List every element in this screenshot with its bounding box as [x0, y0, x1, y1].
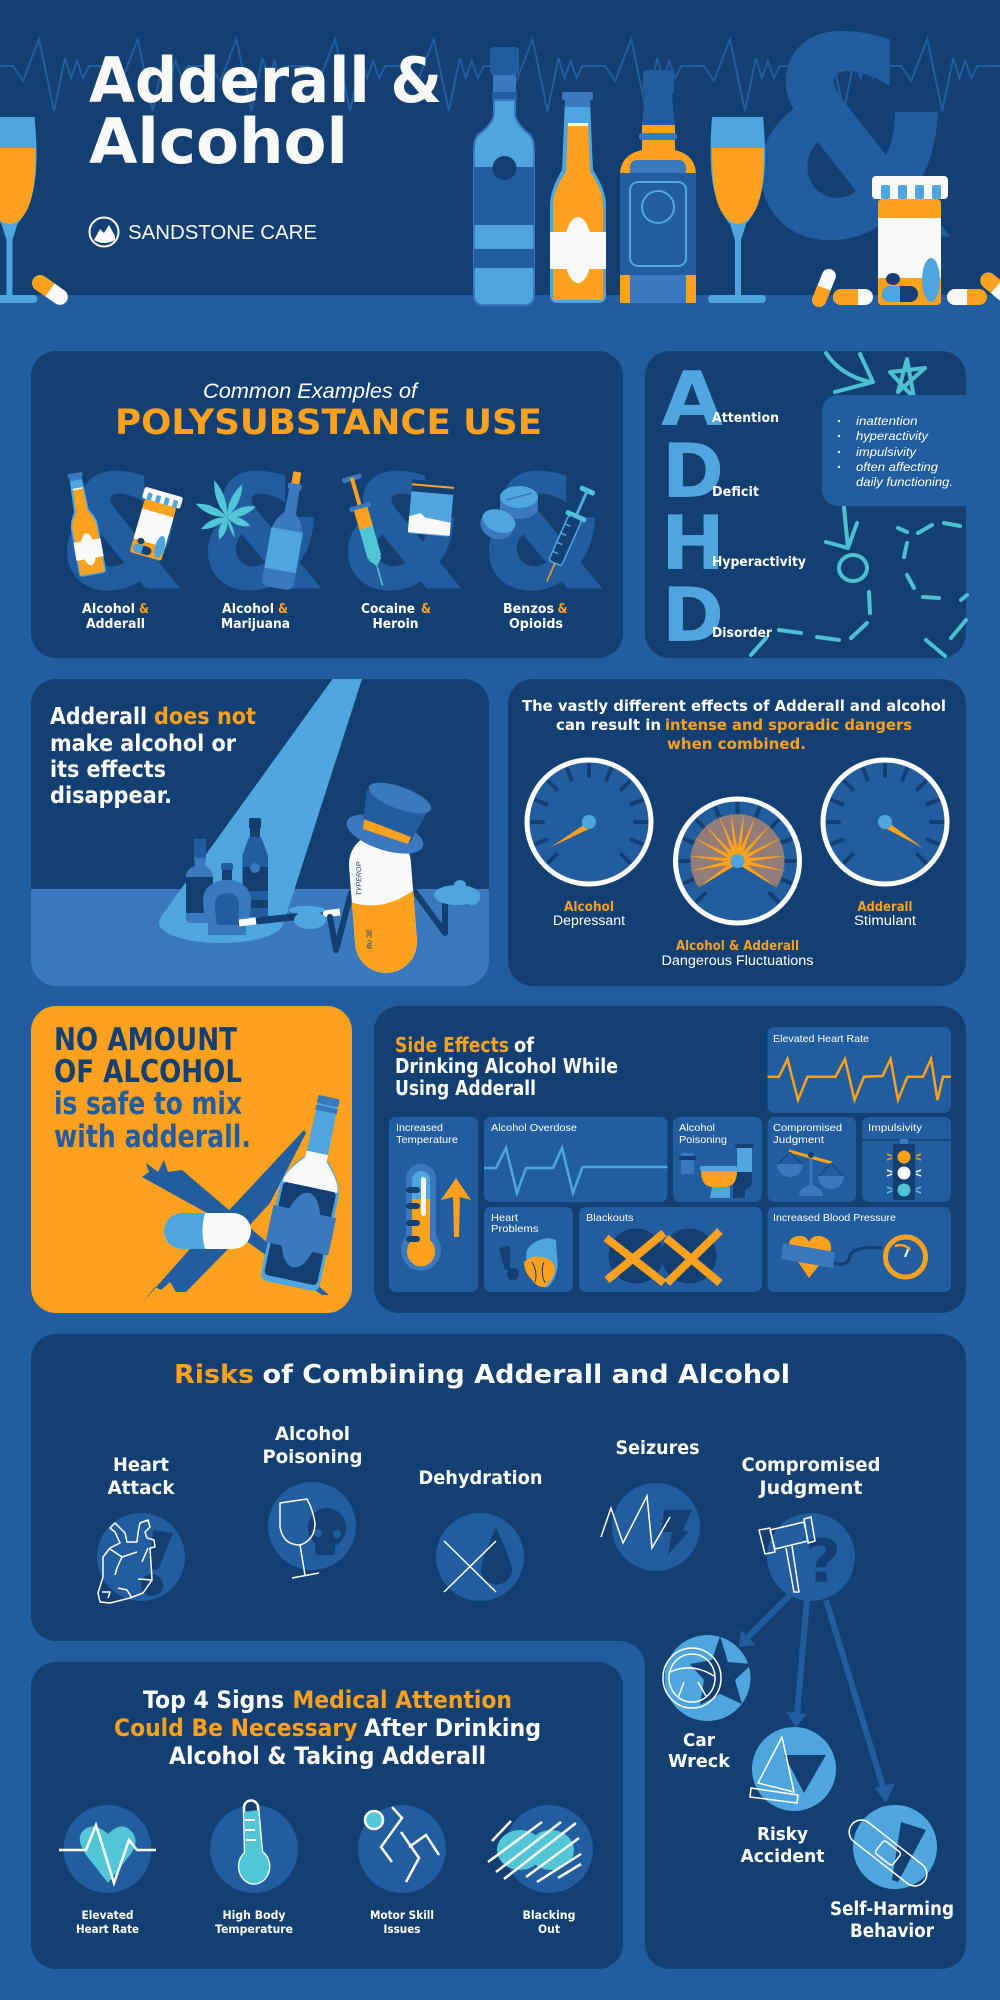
heading: common examples: Common Examples of [203, 380, 419, 403]
top hat [342, 776, 435, 862]
risk: heart attack: Heart [113, 1454, 169, 1476]
heartbeat line [0, 39, 1000, 111]
outcome: risky accident: Accident [740, 1846, 825, 1867]
risk: dehydration [418, 1467, 542, 1601]
sign: motor skill issues: Issues [384, 1922, 421, 1936]
label: alcohol and adderall: & [139, 602, 149, 617]
card: increased temperature: Temperature [396, 1134, 458, 1146]
icon: orange X marks [606, 1231, 720, 1283]
heading: polysubstance use: POLYSUBSTANCE USE [115, 403, 542, 443]
heading: The vastly different effects of Adderall and alcohol [522, 697, 946, 715]
sign: elevated heart rate: Heart Rate [76, 1922, 139, 1936]
card: increased temperature: Increased [396, 1122, 443, 1134]
card: alcohol overdose: Alcohol Overdose [491, 1122, 577, 1134]
panel: risks of combining [31, 1334, 966, 1969]
pill [164, 1213, 251, 1249]
label: disorder: Disorder [712, 625, 772, 641]
card: increased blood pressure: Increased Blood Pressure [773, 1212, 896, 1224]
sign: elevated heart rate: Elevated [82, 1908, 134, 1922]
outcome: car wreck [663, 1635, 752, 1772]
risk: alcohol poisoning: Poisoning [262, 1446, 362, 1468]
letter D: D [662, 427, 724, 515]
card: heart problems: Heart [491, 1212, 518, 1224]
icon: baggie of powder [408, 479, 454, 537]
beer bottle [258, 1090, 360, 1293]
outcome: self-harming behavior: Behavior [850, 1921, 935, 1942]
teal doodles [751, 353, 967, 656]
sign: blacking out: Out [538, 1922, 560, 1936]
outcome: car wreck: Car [683, 1730, 715, 1751]
icon: toilet [679, 1144, 754, 1198]
gauge: combined [676, 799, 800, 923]
gauge label: adderall: Adderall [858, 899, 912, 915]
card: blackouts [579, 1207, 762, 1292]
panel: adderall does not make alcohol disappear [31, 679, 489, 986]
heading: of [514, 1033, 535, 1057]
label: alcohol and adderall: Adderall [86, 617, 145, 632]
panel: top 4 signs [31, 1662, 623, 1969]
icon: heart with cuff [781, 1236, 835, 1278]
icon: benzo tablets [476, 486, 538, 544]
sign: blacking out [488, 1805, 593, 1936]
whiskey bottle [620, 70, 696, 303]
heading [114, 1686, 541, 1770]
statement text: is safe to mix [54, 1086, 242, 1122]
risk: dehydration: Dehydration [418, 1467, 542, 1489]
card: elevated heart rate [768, 1027, 951, 1113]
label: cocaine and heroin: & [421, 602, 431, 617]
statement text: Adderall [50, 704, 147, 730]
label: alcohol and adderall [82, 602, 149, 632]
gauge label: adderall: Stimulant [854, 913, 916, 928]
card: impulsivity: Impulsivity [868, 1122, 923, 1134]
heading: Alcohol & Taking Adderall [169, 1742, 486, 1770]
label: deficit: Deficit [712, 484, 760, 500]
risk: seizures: Seizures [616, 1437, 700, 1459]
wand [238, 912, 340, 923]
heading: can result in [556, 716, 661, 734]
icon: anatomical heart [524, 1238, 558, 1287]
spotlight [159, 679, 362, 943]
heading [522, 697, 946, 753]
heading: Side Effects [395, 1033, 509, 1057]
panel: no amount of alcohol [31, 1006, 360, 1313]
outcome: risky accident [740, 1727, 836, 1867]
header banner [0, 0, 1000, 309]
card: alcohol poisoning [673, 1117, 762, 1202]
statement text: OF ALCOHOL [54, 1054, 242, 1090]
card: alcohol overdose [484, 1117, 668, 1202]
logo: Sandstone Care [90, 218, 317, 246]
risk: compromised judgment: ? [805, 1527, 841, 1597]
label: benzos and opioids: Benzos [503, 602, 554, 617]
risk: alcohol poisoning: Alcohol [275, 1423, 350, 1445]
callout: symptoms: hyperactivity [856, 429, 929, 443]
sign: high body temperature: High Body [222, 1908, 286, 1922]
icon: pill bottle [127, 487, 183, 562]
icon: skull [308, 1508, 346, 1555]
sign: motor skill issues [358, 1805, 446, 1936]
card: compromised judgment [768, 1117, 856, 1202]
icon: heart outline [98, 1520, 155, 1603]
icon: marijuana leaf [194, 479, 257, 541]
panel: different effects gauges [508, 679, 966, 986]
sign: blacking out: Blacking [522, 1908, 576, 1922]
icon: teal syringe [341, 473, 393, 589]
heading: Drinking Alcohol While [395, 1054, 618, 1078]
statement text: its effects [50, 757, 166, 783]
title: Adderall & [89, 44, 442, 117]
icon: exclamation mark [141, 1530, 173, 1596]
background ampersands [61, 445, 603, 622]
card: heart problems [484, 1207, 573, 1292]
right wine glass [708, 117, 766, 303]
label: alcohol and adderall: Alcohol [82, 602, 135, 617]
crossed brush strokes [142, 1130, 329, 1302]
label: benzos and opioids [503, 602, 568, 632]
gauge label: combined: Alcohol & Adderall [676, 938, 799, 954]
pill character [347, 831, 419, 975]
gauge label: combined: Dangerous Fluctuations [662, 953, 814, 968]
heading [395, 1033, 618, 1100]
background ampersands: & [202, 445, 322, 622]
card: compromised judgment: Judgment [773, 1134, 824, 1146]
panel: polysubstance use [31, 351, 623, 658]
callout: symptoms: impulsivity [856, 445, 917, 459]
sign: motor skill issues: Motor Skill [370, 1908, 434, 1922]
sign: elevated heart rate [59, 1805, 156, 1936]
statement text: with adderall. [54, 1119, 251, 1155]
icon: beer bottle [62, 471, 106, 577]
risk: alcohol poisoning [262, 1423, 362, 1578]
label: cocaine and heroin: Heroin [372, 617, 418, 632]
outcome: self-harming behavior: Self-Harming [830, 1899, 954, 1920]
logo: Sandstone Care: SANDSTONE CARE [128, 222, 317, 244]
label: hyperactivity: Hyperactivity [712, 554, 806, 570]
gauge label: alcohol: Depressant [553, 913, 625, 928]
risk: heart attack: Attack [108, 1477, 175, 1499]
heading: of Combining Adderall and Alcohol [262, 1360, 790, 1390]
pill bottle [872, 176, 948, 305]
risk: seizures [601, 1437, 700, 1571]
statement text: disappear. [50, 783, 172, 809]
label: alcohol and marijuana [221, 602, 290, 632]
heading: when combined. [667, 735, 806, 753]
background ampersands: & [342, 445, 462, 622]
letter D: D [662, 571, 724, 659]
pill character: Bu 3E [366, 929, 374, 949]
icon: liquor bottle [261, 469, 313, 591]
statement text: does not [154, 704, 256, 730]
pills right [810, 267, 1000, 309]
card: alcohol poisoning: Alcohol [679, 1122, 715, 1134]
label: benzos and opioids: Opioids [509, 617, 563, 632]
panel: ADHD [645, 351, 967, 659]
heading: Risks [174, 1360, 254, 1390]
connector arrows [739, 1595, 895, 1803]
label: alcohol and marijuana: Marijuana [221, 617, 290, 632]
blue wine bottle [474, 47, 534, 305]
outcome: self-harming behavior [830, 1805, 954, 1942]
label: benzos and opioids: & [558, 602, 568, 617]
card: elevated heart rate: Elevated Heart Rate [773, 1033, 869, 1045]
heading: Top 4 Signs [143, 1686, 284, 1714]
icon: thermometer [401, 1164, 441, 1271]
heading: intense and sporadic dangers [665, 716, 912, 734]
gauge label: alcohol: Alcohol [564, 899, 614, 915]
label: cocaine and heroin: Cocaine [361, 602, 415, 617]
callout: symptoms: inattention [856, 414, 918, 428]
liquor bottles on stage [186, 818, 268, 935]
pill character: TYPEROP [356, 861, 363, 896]
icon: gauge and hose [834, 1237, 926, 1277]
risk: compromised judgment [742, 1454, 880, 1601]
card: increased temperature [389, 1117, 478, 1292]
heading: Could Be Necessary [114, 1714, 358, 1742]
statement text: NO AMOUNT [54, 1022, 237, 1058]
label: attention: Attention [712, 410, 779, 426]
card: increased blood pressure [768, 1207, 951, 1292]
gauge label: adderall [854, 899, 916, 928]
outcome: car wreck: Wreck [668, 1751, 731, 1772]
icon: wine glass outline [280, 1499, 319, 1578]
panel: side effects [374, 1006, 966, 1313]
card: impulsivity [862, 1117, 951, 1202]
icon: exclamation [499, 1246, 519, 1280]
card: alcohol poisoning: Poisoning [679, 1134, 727, 1146]
gauge: adderall [823, 760, 947, 884]
sign: high body temperature: Temperature [215, 1922, 293, 1936]
risk: compromised judgment: Judgment [758, 1477, 862, 1499]
beer bottle [550, 92, 606, 303]
risk: heart attack [97, 1454, 185, 1603]
letter A: A [661, 355, 723, 443]
heading: After Drinking [364, 1714, 541, 1742]
statement text [54, 1022, 251, 1155]
callout: symptoms: often affecting [856, 460, 938, 474]
left wine glass [0, 117, 38, 303]
callout: symptoms [822, 395, 966, 506]
letter H: H [661, 499, 725, 587]
background ampersands: & [61, 445, 181, 622]
title [89, 44, 442, 178]
label: alcohol and marijuana: Alcohol [222, 602, 274, 617]
character arms [330, 892, 445, 950]
gauge label: alcohol [553, 899, 625, 928]
icon: traffic light [887, 1139, 921, 1200]
callout: symptoms: daily functioning. [856, 475, 953, 489]
risk: compromised judgment: Compromised [742, 1454, 880, 1476]
gauge: alcohol [527, 760, 651, 884]
gauge label: combined [662, 938, 814, 968]
card: heart problems: Problems [491, 1223, 538, 1235]
card: compromised judgment: Compromised [773, 1122, 842, 1134]
heading: Medical Attention [292, 1686, 512, 1714]
title: Alcohol [89, 105, 348, 178]
hands [289, 880, 480, 929]
label: cocaine and heroin [361, 602, 431, 632]
pill left [29, 272, 71, 308]
background ampersands: & [483, 445, 603, 622]
card: blackouts: Blackouts [586, 1212, 634, 1224]
sign: high body temperature [210, 1800, 298, 1936]
label: alcohol and marijuana: & [278, 602, 288, 617]
icon: syringe with orange needle [537, 484, 598, 586]
icon: scales [777, 1151, 844, 1196]
icon: up arrow [441, 1178, 471, 1237]
statement text: make alcohol or [50, 731, 237, 757]
statement text [50, 704, 256, 809]
outcome: risky accident: Risky [757, 1824, 808, 1845]
heading: Using Adderall [395, 1076, 536, 1100]
